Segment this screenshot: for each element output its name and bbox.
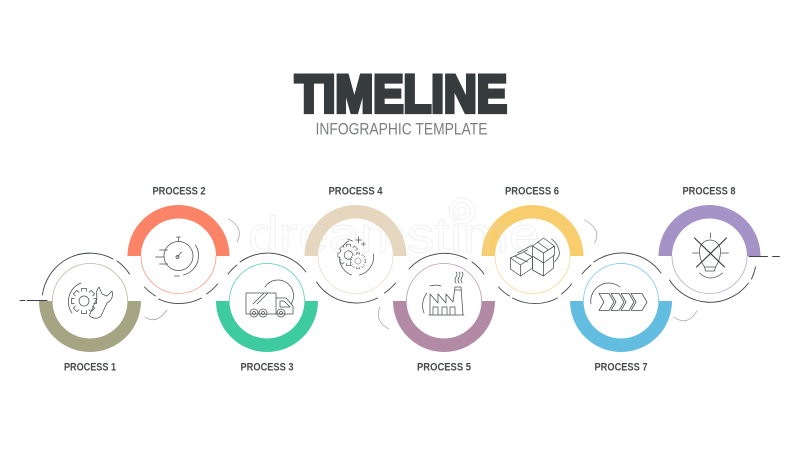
process 7 thin arc bbox=[584, 264, 658, 301]
process 8 dark arcs bbox=[670, 256, 780, 302]
icon: gears with plus signs bbox=[338, 237, 374, 275]
label: process 4: PROCESS 4 bbox=[328, 186, 383, 198]
process 7 ring bbox=[570, 301, 672, 352]
process 8 ring bbox=[658, 205, 760, 256]
process 7 bbox=[570, 253, 697, 352]
process 3 ring bbox=[216, 301, 318, 352]
icon: crossed light bulb bbox=[692, 233, 728, 278]
process 1 small arc bbox=[145, 310, 167, 320]
icon: boxes bbox=[510, 238, 560, 276]
process 3 bbox=[216, 253, 318, 352]
label: process 1: PROCESS 1 bbox=[64, 362, 116, 374]
watermark: dreamstime bbox=[248, 207, 540, 263]
process 6 bbox=[482, 205, 597, 304]
process 2 small arc bbox=[228, 219, 239, 242]
process 1 bbox=[20, 253, 167, 352]
process 5 ring bbox=[393, 301, 495, 352]
icon: truck bbox=[246, 280, 294, 317]
label: process 2: PROCESS 2 bbox=[152, 186, 206, 198]
process 4 bbox=[304, 205, 406, 303]
process 8 bbox=[658, 205, 780, 302]
process 3 thin arc bbox=[230, 264, 304, 301]
process 6 ring bbox=[482, 205, 584, 256]
icon: chevrons bbox=[591, 283, 647, 310]
icon: stopwatch bbox=[156, 237, 199, 276]
title: TIMELINE bbox=[295, 66, 507, 124]
process 2 dark arcs bbox=[144, 284, 218, 304]
process 6 small arc bbox=[584, 220, 597, 243]
process 4 dark arcs bbox=[316, 282, 396, 303]
process 4 ring bbox=[304, 205, 406, 256]
process 3 dark arcs bbox=[228, 253, 306, 274]
process 5 dark arcs bbox=[409, 253, 484, 274]
process 5 thin arc bbox=[406, 264, 482, 301]
process 2 bbox=[128, 205, 239, 304]
process 5 bbox=[378, 253, 495, 352]
label: process 7: PROCESS 7 bbox=[594, 362, 648, 374]
process 6 thin arc bbox=[495, 256, 570, 294]
process 7 dark arcs bbox=[582, 253, 661, 274]
label: process 8: PROCESS 8 bbox=[682, 186, 736, 198]
icon: factory bbox=[423, 272, 464, 315]
icon: gear and wrench bbox=[68, 283, 112, 318]
process 1 dark arcs bbox=[20, 253, 130, 300]
process 1 ring bbox=[39, 301, 141, 352]
process 6 dark arcs bbox=[498, 284, 572, 304]
process 4 thin arc bbox=[318, 256, 393, 294]
process 7 small arc bbox=[674, 311, 697, 321]
process 2 thin arc bbox=[141, 256, 216, 294]
label: process 3: PROCESS 3 bbox=[240, 362, 294, 374]
label: process 5: PROCESS 5 bbox=[417, 362, 471, 374]
process 5 small arc bbox=[378, 307, 389, 329]
process 8 thin arc bbox=[672, 256, 747, 294]
process 2 ring bbox=[128, 205, 230, 256]
process 1 thin arc bbox=[52, 264, 128, 301]
label: process 6: PROCESS 6 bbox=[505, 186, 559, 198]
subtitle: INFOGRAPHIC TEMPLATE bbox=[316, 120, 488, 138]
